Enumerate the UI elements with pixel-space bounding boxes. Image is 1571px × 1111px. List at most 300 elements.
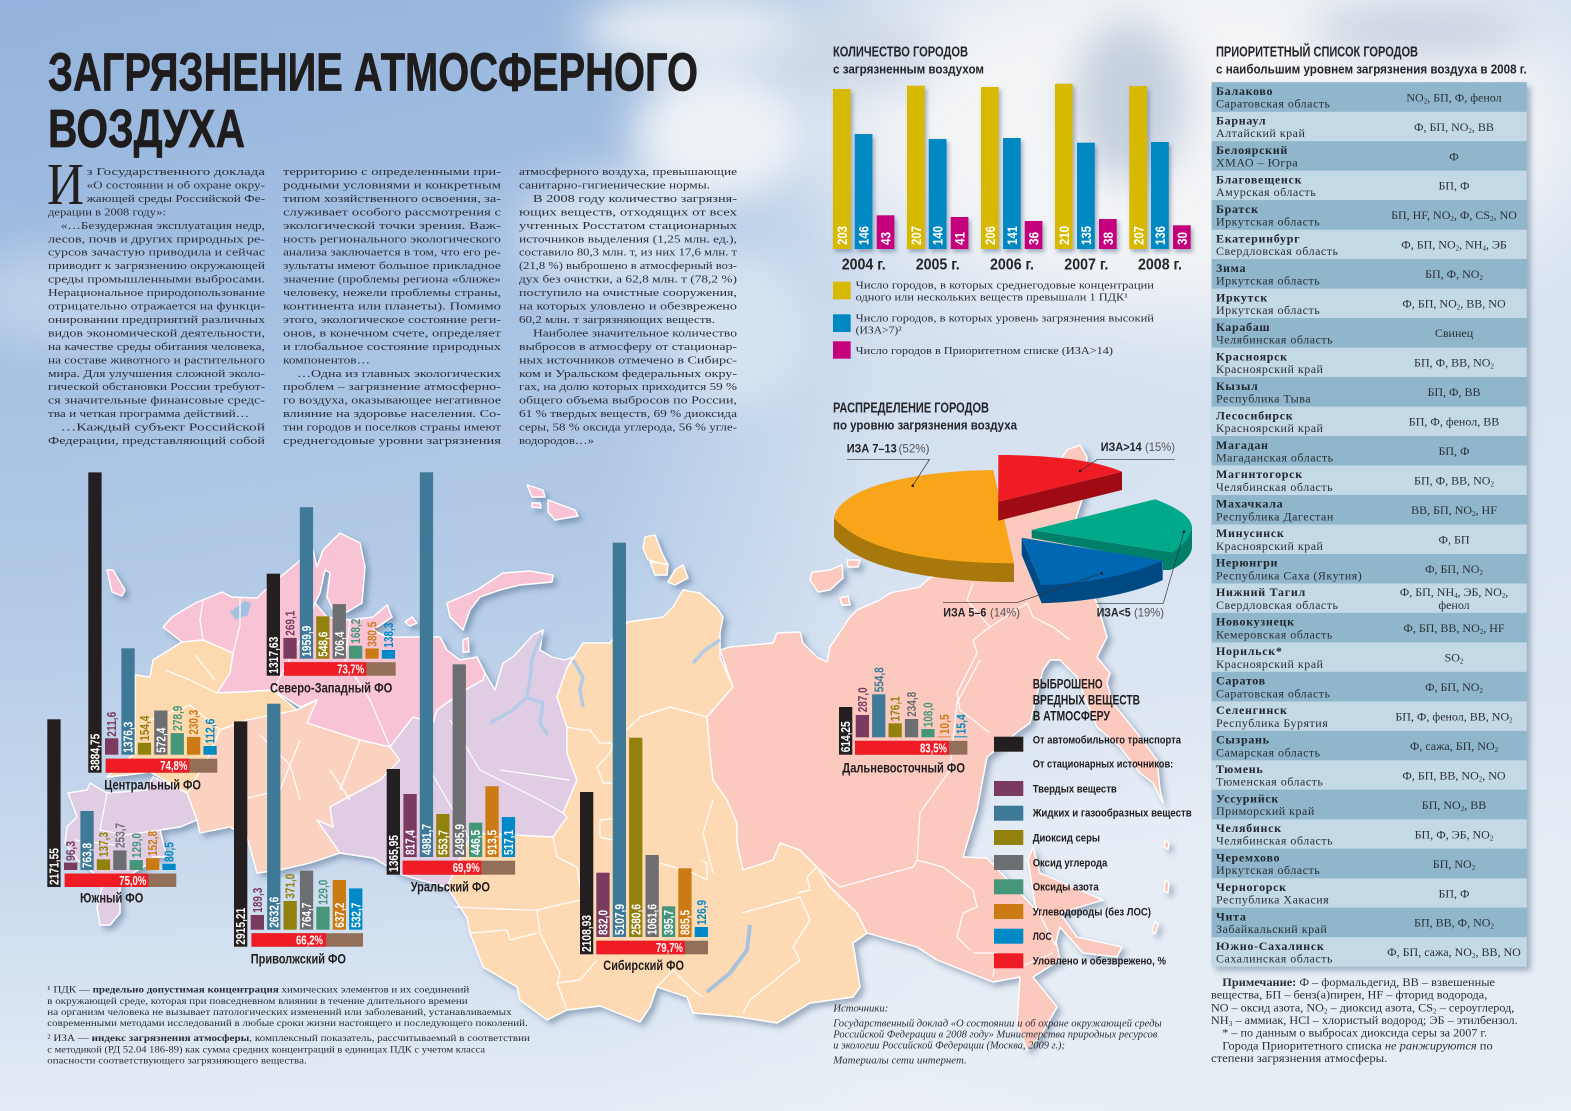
table rows: Красноярский край (1216, 421, 1324, 435)
column 1: видов экономической деятельности, (48, 327, 265, 339)
chart: Северо-Западный ФО: 269,1 (284, 611, 298, 636)
table rows: БП, Ф, NO (1425, 267, 1479, 281)
chart: Сибирский ФО: 1061,6 (646, 904, 660, 935)
panel: distribution pie chart: (14%) (990, 606, 1020, 620)
table rows: Тюменская область (1216, 775, 1323, 789)
chart: Дальневосточный ФО: 10,5 (938, 714, 952, 734)
table rows: Южно-Сахалинск (1216, 939, 1324, 953)
table rows: Кызыл (1216, 379, 1258, 393)
panel: distribution pie chart: (52%) (898, 442, 930, 456)
table rows: 2 (1468, 127, 1472, 135)
table rows: 2 (1479, 775, 1483, 783)
text block: sources: Материалы сети интернет. (832, 1055, 967, 1066)
table rows: , ЭБ (1486, 238, 1507, 252)
column 2: типом хозяйственного освоения, за- (283, 193, 502, 205)
column 1: лесов, почв и других природных ре- (48, 233, 266, 245)
chart: Сибирский ФО: 395,7 (662, 910, 676, 935)
chart: Дальневосточный ФО: 614,25 (839, 721, 853, 752)
chart: Северо-Западный ФО (267, 507, 396, 677)
column 2: родными условиями и конкретным (283, 180, 501, 192)
table rows: 2 (1472, 510, 1476, 518)
table rows: Свердловская область (1216, 244, 1338, 258)
column 3: санитарно-гигиенические нормы. (519, 180, 710, 192)
note under table: NH (1211, 1015, 1227, 1027)
table rows: БП, Ф, ВВ (1427, 385, 1481, 399)
panel: priority list of cities (1211, 43, 1527, 1065)
table rows: SO (1445, 650, 1460, 664)
region: Южный (65, 777, 197, 925)
label: Сибирский ФО: Сибирский ФО (603, 957, 684, 973)
table rows: Ф, сажа, БП, NO (1410, 739, 1495, 753)
chart: Центральный ФО: 572,4 (154, 728, 168, 753)
island: Вайгач (463, 638, 469, 652)
table rows: БП, Ф, фенол, ВВ, NO (1395, 709, 1509, 723)
column 2: человеку, нежели проблемы страны, (283, 287, 501, 299)
column 1: жающей среды Российской Фе- (85, 193, 265, 205)
water: Байкал (707, 925, 750, 992)
chart: Сибирский ФО (580, 543, 709, 955)
slice: ИЗА<5 (1032, 499, 1192, 570)
note under table (1211, 977, 1518, 1065)
chart: Центральный ФО: 1376,3 (122, 722, 136, 753)
legend: emissions (994, 676, 1192, 968)
legend labels: Жидких и газообразных веществ (1032, 808, 1192, 820)
region: Дальневосточный (707, 445, 1163, 1050)
table rows: Ф (1449, 149, 1459, 163)
column 2: экологической точки зрения. Важ- (283, 220, 502, 232)
table rows: 2 (1490, 923, 1494, 931)
heading: ПРИОРИТЕТНЫЙ СПИСОК ГОРОДОВ (1216, 43, 1418, 61)
panel: distribution pie chart: ИЗА 7–13 (847, 442, 897, 456)
table rows: Красноярский край (1216, 657, 1324, 671)
chart: Сибирский ФО: 126,9 (695, 900, 709, 925)
table rows: Челябинская область (1216, 480, 1333, 494)
column 2: ность регионального экологического (283, 233, 501, 245)
legend (833, 279, 1154, 359)
chart: Северо-Западный ФО: 548,6 (316, 632, 330, 657)
chart: Центральный ФО: 211,6 (105, 712, 119, 737)
chart: Уральский ФО: 446,5 (469, 830, 483, 855)
chart: Дальневосточный ФО: 83,5% (920, 741, 947, 755)
year labels: 2007 г. (1064, 256, 1108, 273)
table rows: 4 (1454, 592, 1458, 600)
column 1: Нерациональное природопользование (48, 287, 265, 299)
text block: footnotes: с методикой (РД 52.04 186-89) как сумма средних концентраций в единицах ПДК с учетом класса (47, 1044, 486, 1055)
panel: distribution pie chart: ИЗА<5 (1097, 606, 1131, 620)
legend: Число городов в Приоритетном списке (ИЗА>14) (856, 345, 1113, 357)
table rows: Забайкальский край (1216, 922, 1327, 936)
table rows: Иркутск (1216, 290, 1268, 304)
legend labels: ЛОС (1033, 931, 1052, 943)
table rows: Минусинск (1216, 526, 1284, 540)
table rows: Норильск* (1216, 644, 1283, 658)
chart: Южный ФО: 75,0% (119, 874, 146, 888)
text block: footnotes: ² ИЗА — индекс загрязнения атмосферы , комплексный показатель, рассчитываемый в соответствии (47, 1033, 531, 1044)
bar value labels: 135 (1078, 226, 1094, 245)
bar value labels: 203 (834, 226, 850, 245)
chart: Южный ФО: 763,8 (81, 843, 95, 868)
note under table: – диоксид азота, CS (1328, 1002, 1433, 1014)
table rows: 2 (1509, 716, 1513, 724)
column 3: на которых уловлено и обезврежено (519, 300, 737, 312)
column 3 (519, 166, 738, 447)
legend: одного или нескольких веществ превышали 1 ПДК¹ (856, 292, 1128, 304)
label: Приволжский ФО: Приволжский ФО (251, 950, 346, 966)
column 3: ком и Уральском федеральных окру- (519, 368, 738, 380)
table rows: 2 (1479, 687, 1483, 695)
table rows: Саратов (1216, 674, 1266, 688)
column 3: гах, на долю которых приходится 59 % (519, 381, 737, 393)
chart: Сибирский ФО: 885,5 (678, 910, 692, 935)
table rows: Нижний Тагил (1216, 585, 1306, 599)
heading (1216, 43, 1527, 76)
text block: footnotes: современными методами исследований в любые сроки жизни настоящего и последующего поколений. (47, 1018, 528, 1029)
table rows: Ф, БП, NH (1400, 585, 1454, 599)
note under table: NO – оксид азота, NO (1211, 1002, 1316, 1014)
text block: sources (832, 1004, 1162, 1066)
text block: sources: Источники: (832, 1004, 888, 1015)
column 2: …Одна из главных экологических (297, 368, 502, 380)
table rows: Нерюнгри (1216, 556, 1278, 570)
text block: footnotes: опасности соответствующего загрязняющего вещества. (47, 1055, 307, 1066)
column 1: приводит к загрязнению окружающей (48, 260, 265, 272)
table rows: Братск (1216, 202, 1259, 216)
bar value labels: 146 (856, 226, 872, 245)
label: Уральский ФО: Уральский ФО (411, 879, 490, 895)
text block: footnotes (47, 985, 531, 1066)
table rows: 2 (1490, 480, 1494, 488)
table rows: БП, NO (1433, 857, 1472, 871)
table rows: Иркутская область (1216, 863, 1320, 877)
column 1: онировании предприятий различных (48, 314, 266, 326)
text block: sources: Государственный доклад «О состоянии и об охране окружающей среды (832, 1018, 1162, 1029)
chart: Южный ФО: 2171,55 (47, 848, 61, 885)
legend: Число городов, в которых уровень загрязнения высокий (856, 313, 1154, 325)
table rows: , Ф, CS (1454, 208, 1490, 222)
chart: Центральный ФО: 3884,75 (89, 734, 103, 771)
note under table: 2 (1433, 1007, 1437, 1015)
slice: ИЗА 7-13 (834, 470, 1014, 582)
island: Новая Земля (447, 571, 553, 630)
note under table: 3 (1229, 1020, 1233, 1028)
table rows: БП, HF, NO (1391, 208, 1450, 222)
table rows: 2 (1460, 657, 1464, 665)
table rows: Саратовская область (1216, 686, 1331, 700)
chart: Северо-Западный ФО: 73,7% (337, 663, 364, 677)
chart: Северо-Западный ФО: 138,3 (382, 623, 396, 648)
chart: Уральский ФО (387, 472, 516, 875)
chart: Южный ФО: 129,0 (130, 833, 144, 858)
legend heading (1033, 676, 1140, 723)
chart: Центральный ФО: 154,4 (138, 716, 152, 741)
chart: Уральский ФО: 2495,9 (453, 824, 467, 855)
column 1: з Государственного доклада (87, 166, 265, 178)
table rows: Свердловская область (1216, 598, 1338, 612)
islands: Земля Франца-Иосифа (527, 485, 578, 520)
chart: Сибирский ФО: 832,0 (596, 910, 610, 935)
label: Южный ФО: Южный ФО (80, 890, 143, 906)
chart: Уральский ФО: 553,7 (436, 830, 450, 855)
table rows: , ВВ (1472, 120, 1494, 134)
column 2: значение (проблемы региона «ближе» (283, 274, 501, 286)
chart: Приволжский ФО: 129,0 (316, 880, 330, 905)
table rows (1212, 82, 1527, 967)
water: Ладожское озеро (230, 601, 251, 620)
chart: Южный ФО: 253,7 (113, 823, 127, 848)
table rows: Иркутская область (1216, 274, 1320, 288)
chart: Уральский ФО: 4981,7 (420, 824, 434, 855)
table rows: Красноярск (1216, 349, 1288, 363)
column 2: зультаты имеют большое прикладное (283, 260, 501, 272)
table rows: Магаданская область (1216, 451, 1334, 465)
chart: Сибирский ФО: 5107,9 (613, 904, 627, 935)
table rows: фенол (1438, 598, 1470, 612)
bar value labels (834, 226, 1190, 245)
column 1: на составе животного и растительного (48, 354, 265, 366)
island: Сахалин (1028, 847, 1122, 957)
column 2: тни городов и поселков страны имеют (283, 422, 501, 434)
islands: Северная Земля (643, 535, 688, 585)
chart: Сибирский ФО: 2580,6 (629, 904, 643, 935)
table rows: Лесосибирск (1216, 408, 1293, 422)
table rows: , (1505, 585, 1508, 599)
table rows: Карабаш (1216, 320, 1270, 334)
title (48, 42, 698, 159)
column 1: Федерации, представляющий собой (48, 435, 265, 447)
chart: Северо-Западный ФО: 1317,63 (267, 637, 281, 674)
year labels: 2006 г. (990, 256, 1034, 273)
heading: РАСПРЕДЕЛЕНИЕ ГОРОДОВ (833, 401, 989, 417)
table rows: , HF (1476, 503, 1497, 517)
table rows: Красноярский край (1216, 362, 1324, 376)
table rows: Республика Бурятия (1216, 716, 1328, 730)
table shadow (1212, 82, 1527, 967)
year labels: 2005 г. (916, 256, 960, 273)
table rows: Селенгинск (1216, 703, 1288, 717)
chart: Приволжский ФО: 532,7 (349, 903, 363, 928)
map of Russia by federal districts (65, 445, 1169, 1050)
table rows: Кемеровская область (1216, 627, 1333, 641)
chart: Уральский ФО: 517,1 (502, 830, 516, 855)
bar value labels: 210 (1056, 226, 1072, 245)
region: Центральный (107, 640, 297, 793)
table rows: 2 (1479, 569, 1483, 577)
year labels: 2008 г. (1138, 256, 1182, 273)
table rows: Красноярский край (1216, 539, 1324, 553)
table rows: , ВВ, NO (1460, 297, 1506, 311)
panel: number of cities bar chart (833, 45, 1191, 359)
region: Уральский (317, 630, 577, 887)
table rows: 2 (1502, 592, 1506, 600)
column 2: го воздуха, оказывающее негативное (283, 395, 501, 407)
column 3: составило 80,3 млн. т, из них 17,6 млн. т (519, 247, 737, 259)
table rows: Республика Хакасия (1216, 893, 1329, 907)
chart: Приволжский ФО: 189,3 (251, 888, 265, 913)
table rows: , NO (1494, 208, 1517, 222)
bar value labels: 206 (982, 226, 998, 245)
column 3: ющих веществ, отходящих от всех (519, 206, 738, 218)
chart: Северо-Западный ФО: 1959,9 (300, 626, 314, 657)
bar value labels: 207 (1130, 226, 1146, 245)
table rows: Чита (1216, 909, 1247, 923)
note under table: – сероуглерод, (1437, 1002, 1514, 1014)
legend labels: Углеводороды (без ЛОС) (1033, 906, 1151, 918)
bar value labels: 30 (1174, 232, 1190, 245)
bar value labels: 136 (1152, 226, 1168, 245)
table rows: ВВ, БП, NO (1411, 503, 1472, 517)
table rows: Ф, БП, NO (1401, 238, 1456, 252)
legend labels: Оксид углерода (1033, 857, 1108, 869)
table rows: Магнитогорск (1216, 467, 1303, 481)
bar value labels: 207 (908, 226, 924, 245)
table rows: 2 (1424, 97, 1428, 105)
year labels: 2004 г. (842, 256, 886, 273)
column 3: выбросов в атмосферу от стационар- (519, 341, 738, 353)
table rows: Амурская область (1216, 185, 1316, 199)
table rows: ХМАО – Югра (1216, 156, 1298, 170)
column 1: среды промышленными выбросами. (48, 274, 265, 286)
legend swatches (994, 737, 1023, 968)
legend labels: Диоксид серы (1033, 833, 1100, 845)
bar value labels: 38 (1100, 232, 1116, 245)
title: ВОЗДУХА (48, 99, 245, 159)
islands: Новосибирские (810, 560, 860, 605)
table rows: Ф, БП, ВВ, NO (1403, 621, 1480, 635)
column 1: гической обстановки России требуют- (48, 381, 265, 393)
heading (833, 401, 1018, 432)
table rows: 2 (1472, 864, 1476, 872)
bar value labels: 41 (952, 232, 968, 245)
table rows: , ВВ (1464, 798, 1486, 812)
column 3: источников выделения (1,25 млн. ед.), (519, 233, 737, 245)
text block: intro columns (47, 151, 738, 447)
region: Сибирский (447, 590, 867, 1023)
table rows: БП, Ф (1438, 179, 1470, 193)
table rows: Ф, БП, сажа, NO (1387, 945, 1472, 959)
chart: Приволжский ФО: 764,7 (300, 903, 314, 928)
chart: Дальневосточный ФО: 15,4 (954, 714, 968, 734)
column 2: континента или планеты). Помимо (283, 300, 501, 312)
column 1: «…Безудержная эксплуатация недр, (61, 220, 265, 232)
column 2: анализа заключается в том, что его ре- (283, 247, 501, 259)
chart: Южный ФО: 96,3 (64, 841, 78, 861)
table rows: Республика Дагестан (1216, 509, 1334, 523)
table rows: Махачкала (1216, 497, 1283, 511)
bars (833, 84, 1191, 249)
column 2: среднегодовые уровни загрязнения (283, 435, 501, 447)
column 1: тва и четкая программа действий… (48, 408, 249, 420)
table rows: , ВВ, NO (1475, 945, 1521, 959)
column 3: учтенных Росстатом стационарных (519, 220, 738, 232)
table rows: БП, Ф, ВВ, NO (1414, 474, 1490, 488)
chart: Сибирский ФО: 79,7% (656, 941, 683, 955)
heading: КОЛИЧЕСТВО ГОРОДОВ (833, 45, 968, 61)
pie labels and leaders (847, 459, 1184, 603)
chart: Центральный ФО: 74,8% (160, 759, 187, 773)
island: Колгуев (405, 617, 417, 626)
column 3: общего объема выбросов по России, (519, 395, 737, 407)
table rows: , NH (1459, 238, 1483, 252)
heading: по уровню загрязнения воздуха (833, 418, 1018, 432)
column 1: мира. Для улучшения сложной эколо- (48, 368, 265, 380)
text block: sources: Российской Федерации в 2008 году» Министерства природных ресурсов (832, 1030, 1158, 1041)
column 1: ся значительные финансовые средс- (48, 395, 266, 407)
table rows: , NO (1482, 768, 1506, 782)
legend labels: Оксиды азота (1033, 882, 1099, 894)
chart: Северо-Западный ФО: 380,5 (366, 622, 380, 647)
table rows: Белоярский (1216, 143, 1288, 157)
legend labels: Твердых веществ (1033, 783, 1117, 795)
table rows: Республика Тыва (1216, 392, 1311, 406)
chart: Уральский ФО: 69,9% (453, 861, 480, 875)
chart: Центральный ФО: 230,3 (187, 710, 201, 735)
table rows: Челябинск (1216, 821, 1282, 835)
table rows: Ф, БП, NO (1425, 562, 1479, 576)
text block: footnotes: ¹ ПДК — предельно допустимая концентрация химических элементов и их соединений (47, 985, 470, 996)
table rows: Саратовская область (1216, 97, 1331, 111)
note under table: степени загрязнения атмосферы. (1211, 1053, 1387, 1065)
table rows: Иркутская область (1216, 215, 1320, 229)
table rows: Барнаул (1216, 114, 1266, 128)
column 2: компонентов… (283, 354, 370, 366)
column 1: …Каждый субъект Российской (61, 422, 265, 434)
chart: Уральский ФО: 1365,95 (387, 835, 401, 872)
column 1: дерации в 2008 году»: (48, 206, 166, 218)
chart: Дальневосточный ФО: 108,0 (922, 702, 936, 727)
table rows: Уссурийск (1216, 791, 1279, 805)
chart: Приволжский ФО: 66,2% (296, 934, 323, 948)
table rows: БП, Ф, фенол, ВВ (1409, 415, 1499, 429)
table rows: Сызрань (1216, 733, 1270, 747)
table rows: Ф, БП (1438, 532, 1470, 546)
panel: distribution pie chart: ИЗА 5–6 (943, 606, 987, 620)
heading: с наибольшим уровнем загрязнения воздуха в 2008 г. (1216, 62, 1527, 76)
panel: distribution pie chart: (19%) (1134, 606, 1164, 620)
table rows: БП, ВВ, Ф, NO (1414, 916, 1490, 930)
chart: Приволжский ФО: 2632,6 (267, 897, 281, 928)
panel: distribution pie chart: (15%) (1145, 440, 1175, 454)
column 3: серы, 58 % оксида углерода, 56 % угле- (519, 422, 737, 434)
note under table: – аммиак, HCl – хлористый водород; ЭБ – этилбензол. (1232, 1015, 1518, 1027)
table rows: 2 (1479, 274, 1483, 282)
column 1: отрицательно отражается на функци- (48, 300, 265, 312)
islands: Курилы (1152, 840, 1169, 934)
table rows: Магадан (1216, 438, 1269, 452)
table rows: Новокузнецк (1216, 615, 1295, 629)
table rows: 2 (1456, 245, 1460, 253)
chart: Приволжский ФО: 371,0 (284, 874, 298, 899)
chart: Центральный ФО: 278,9 (171, 706, 185, 731)
column 2: территорию с определенными при- (283, 166, 502, 178)
text block: footnotes: на организм человека не вызывает патологических изменений или заболеваний, устанавливаемых (47, 1007, 512, 1018)
chart: Южный ФО: 137,3 (97, 832, 111, 857)
chart: Северо-Западный ФО: 706,4 (333, 632, 347, 657)
table rows: Екатеринбург (1216, 231, 1300, 245)
table rows: Челябинская область (1216, 333, 1333, 347)
chart: Дальневосточный ФО: 234,8 (905, 692, 919, 717)
chart: Уральский ФО: 817,4 (404, 830, 418, 855)
column 3: 61 % твердых веществ, 69 % диоксида (519, 408, 737, 420)
column 3: атмосферного воздуха, превышающие (519, 166, 737, 178)
chart: Дальневосточный ФО (839, 667, 968, 755)
column 2: служивает особого рассмотрения с (283, 206, 501, 218)
column 2: и глобальное состояние природных (283, 341, 502, 353)
table rows: БП, NO (1422, 798, 1461, 812)
column 2 (283, 166, 502, 447)
column 1: сурсов зачастую приводила и сейчас (48, 247, 265, 259)
column 2: влияние на здоровье населения. Со- (283, 408, 502, 420)
table rows: 2 (1490, 834, 1494, 842)
